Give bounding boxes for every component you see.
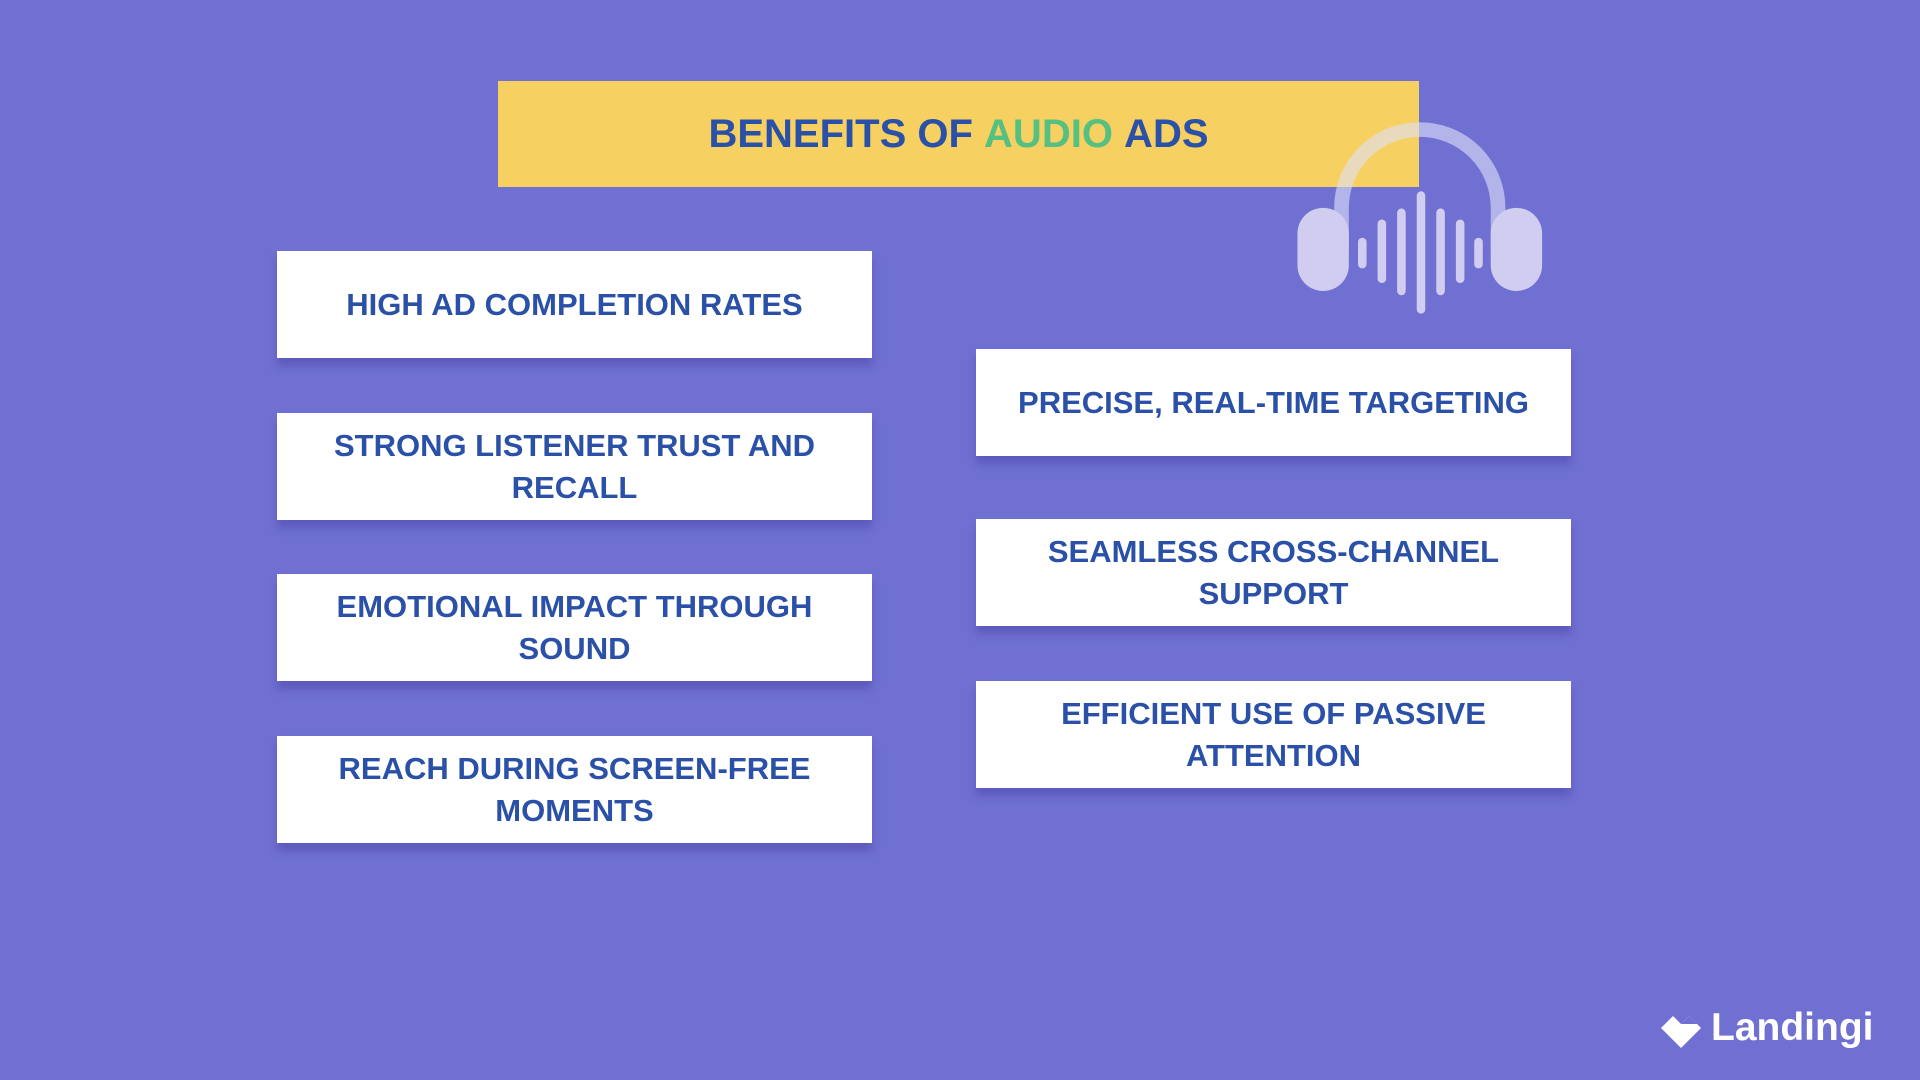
box: listener trust: RECALL — [512, 470, 637, 504]
box: emotional impact — [277, 574, 872, 681]
title bar: AUDIO — [984, 112, 1113, 156]
box: emotional impact: EMOTIONAL IMPACT THROUGH — [337, 588, 812, 624]
box: high ad completion: HIGH AD COMPLETION RATES — [346, 286, 803, 322]
box: cross-channel: SUPPORT — [1199, 576, 1348, 610]
box: passive attention: EFFICIENT USE OF PASSIVE — [1061, 696, 1486, 730]
box: high ad completion — [277, 251, 872, 358]
box: listener trust: STRONG LISTENER TRUST AND — [334, 428, 815, 462]
box: cross-channel — [976, 519, 1571, 626]
title bar: BENEFITS OF ADS — [708, 112, 1209, 156]
icon: headphones — [1297, 122, 1542, 314]
box: listener trust — [277, 413, 872, 520]
title bar — [498, 81, 1419, 187]
logo: Landingi: Landingi — [1711, 1006, 1873, 1049]
box: screen-free: MOMENTS — [495, 792, 654, 828]
box: emotional impact: SOUND — [519, 630, 630, 666]
box: passive attention: ATTENTION — [1186, 738, 1361, 772]
box: screen-free: REACH DURING SCREEN-FREE — [339, 750, 810, 786]
box: passive attention — [976, 681, 1571, 788]
box: cross-channel: SEAMLESS CROSS-CHANNEL — [1048, 534, 1499, 568]
box: screen-free — [277, 736, 872, 843]
box: targeting — [976, 349, 1571, 456]
box: targeting: PRECISE, REAL-TIME TARGETING — [1018, 384, 1529, 420]
